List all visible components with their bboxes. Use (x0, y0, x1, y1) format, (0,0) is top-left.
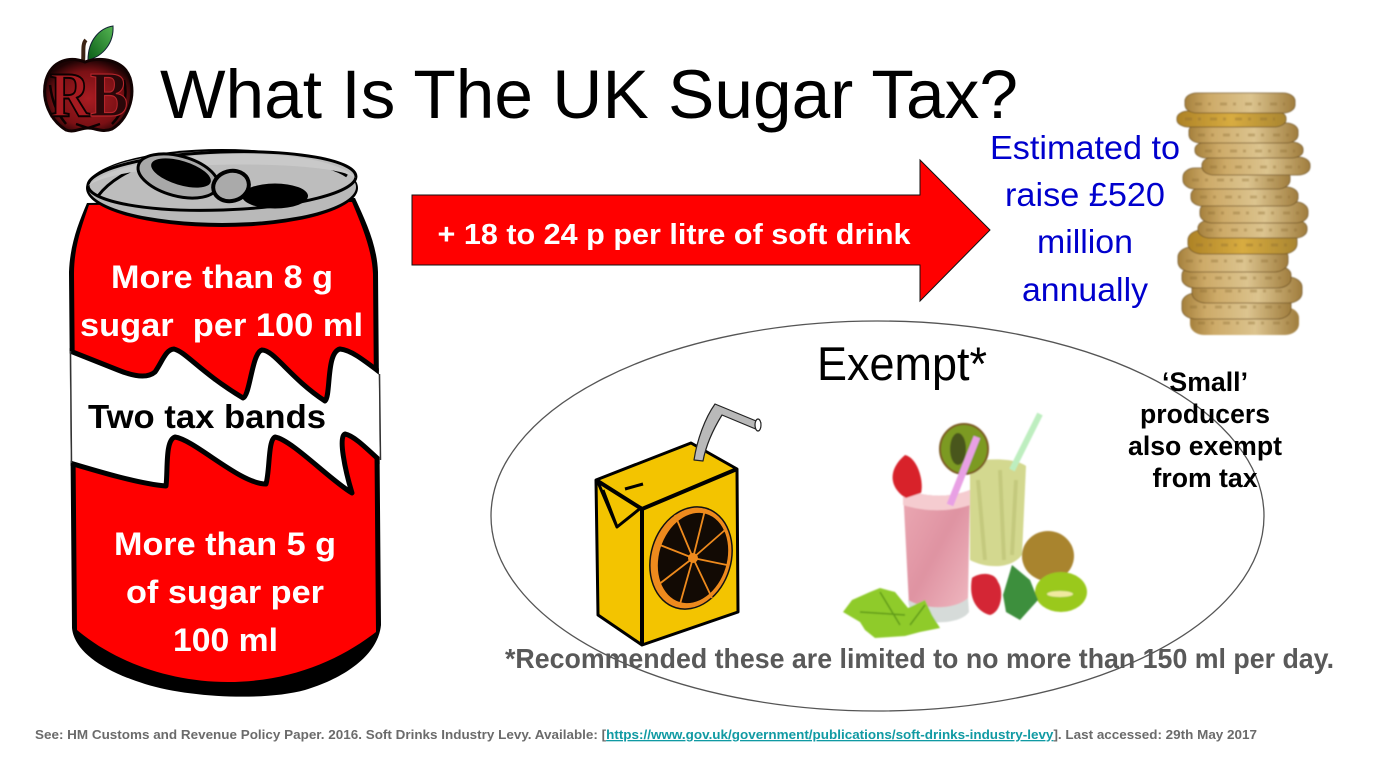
leaf (843, 588, 940, 638)
recommendation note: *Recommended these are limited to no more than 150 ml per day. (505, 643, 1334, 674)
small producers note: producers (1140, 399, 1270, 429)
kiwi slice on glass (940, 424, 988, 474)
can labels: More than 8 g (111, 259, 333, 295)
orange slice (638, 497, 744, 619)
soft drink can: of sugar per (126, 574, 324, 610)
small producers note (1128, 367, 1282, 493)
can body (69, 198, 381, 697)
soft drink can: sugar per 100 ml (80, 307, 363, 343)
soft drink can (60, 146, 390, 697)
small producers note: also exempt (1128, 431, 1282, 461)
kiwi and strawberries (1022, 531, 1074, 581)
source citation: See: HM Customs and Revenue Policy Paper. 2016. Soft Drinks Industry Levy. Available: [ https://www.gov.uk/government/publications/soft-drinks-industry-levy ]. Last accessed: 29th May 2017 (35, 727, 1257, 742)
green smoothie (970, 459, 1026, 566)
small producers note: from tax (1152, 463, 1258, 493)
revenue estimate: Estimated to (990, 130, 1180, 167)
soft drink can: Two tax bands (88, 398, 326, 435)
white band (60, 347, 390, 493)
small producers note: ‘Small’ (1162, 367, 1248, 397)
revenue estimate: raise £520 (1005, 177, 1165, 214)
strawberry on rim (893, 455, 922, 498)
revenue estimate (990, 130, 1180, 309)
soft drink can: More than 5 g (114, 526, 336, 562)
pull tab (133, 146, 223, 206)
straw (694, 404, 761, 461)
revenue estimate: million (1037, 224, 1133, 261)
soft drink can: 100 ml (173, 622, 278, 658)
panel: exempt ellipse (491, 321, 1264, 711)
icon: juice box (596, 404, 761, 645)
pink smoothie (903, 488, 970, 613)
logo: apple (45, 26, 132, 131)
arrow: levy rate: + 18 to 24 p per litre of soft drink (438, 219, 911, 251)
revenue estimate: annually (1022, 272, 1148, 309)
logo: apple: B (90, 59, 128, 130)
can lid (86, 149, 358, 227)
title: What Is The UK Sugar Tax? (160, 56, 1018, 133)
icon: smoothies and fruit (843, 414, 1087, 638)
heading: exempt: Exempt* (817, 337, 987, 390)
arrow: levy rate (412, 160, 990, 301)
logo: apple: R (50, 59, 91, 130)
icon: coin stack (1177, 93, 1310, 335)
